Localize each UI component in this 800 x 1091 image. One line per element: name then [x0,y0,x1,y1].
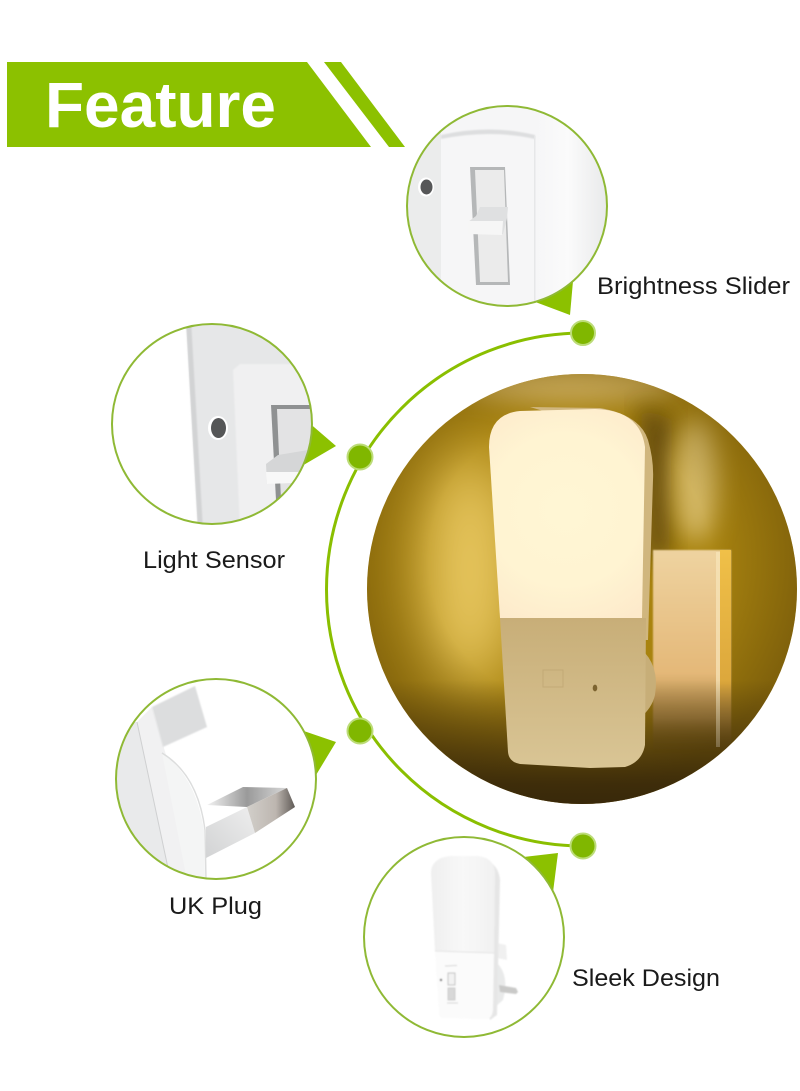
line pin top [207,787,287,807]
back shell [470,856,500,1020]
lamp base [500,618,646,768]
detail circle: sleek design [364,837,564,1037]
slot [271,405,310,500]
sensor hole [208,416,228,440]
base [435,951,494,1019]
wall glow above lamp [460,367,680,403]
connector dot: UK plug [348,718,372,744]
plug disc [494,962,505,1008]
slider knob [266,450,307,472]
shade line [435,951,494,953]
wall background [360,370,800,810]
line pin end [247,788,295,833]
wall glow left of lamp [425,450,515,690]
circle fill [407,106,607,306]
earth pin [497,943,507,960]
circle outline [364,837,564,1037]
sensor hole [593,685,597,691]
edge vignette [360,370,800,810]
round shield [167,758,205,877]
wall glow top right [674,418,718,542]
door frame [653,550,731,755]
lamp shade [489,409,645,618]
lamp back shell [530,407,653,640]
device photo [117,686,295,878]
connector arc [326,333,583,846]
circle outline [407,106,607,306]
slider outline [543,670,563,687]
pointer [515,853,558,900]
line pin [499,985,518,994]
circle fill [116,679,316,879]
pointer [295,415,336,470]
circle outline [112,324,312,524]
dark vignette bottom [394,685,770,804]
label: light sensor: Light Sensor [143,547,285,574]
circle fill [112,324,312,524]
slider slot [470,167,510,285]
earth pin [152,686,207,747]
detail circle: UK plug [100,679,336,885]
detail circle: brightness slider [405,100,608,315]
label: brightness slider: Brightness Slider [597,273,790,300]
label: sleek design: Sleek Design [572,965,720,992]
connector dot: sleek design [570,834,596,858]
pointer [295,728,336,785]
title banner [7,62,405,147]
main photo: glowing night light [360,367,800,810]
banner stripe [324,62,405,147]
line pin side [206,807,255,858]
sensor dot [440,979,442,981]
slider switch [445,966,458,1003]
connector dot: light sensor [348,444,372,470]
plug body [117,722,167,865]
slider knob [468,207,508,234]
lamp shadow on wall [640,405,672,570]
banner shape [7,62,371,147]
shade [431,856,495,953]
connector dot: brightness slider [571,321,595,345]
detail circle: light sensor [112,320,336,530]
plug bulge [645,654,656,714]
pointer [530,281,573,315]
circle outline [116,679,316,879]
device photo [186,325,311,523]
label: UK plug: UK Plug [169,893,262,920]
device photo [405,100,608,310]
sensor hole [418,178,434,196]
title text: Feature [45,69,276,141]
product illustration [431,856,518,1020]
